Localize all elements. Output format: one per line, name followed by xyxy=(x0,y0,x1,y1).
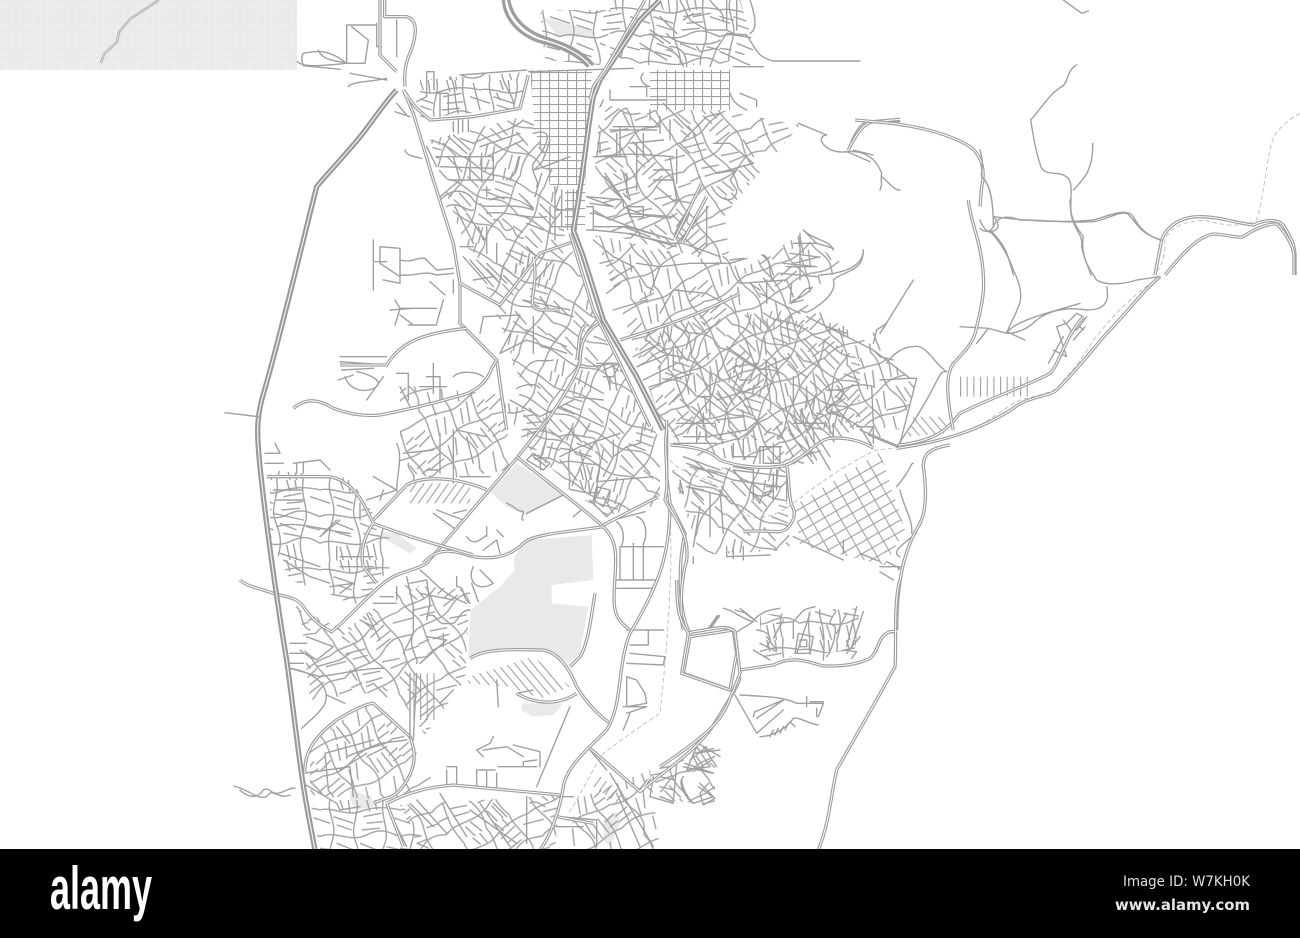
top river road xyxy=(506,0,591,66)
website url: www.alamy.com xyxy=(1115,896,1250,914)
left highway xyxy=(258,90,397,850)
north-east loop road xyxy=(848,119,900,150)
park areas xyxy=(350,463,620,847)
minor streets: south-east neighbourhoods xyxy=(660,607,863,805)
north park xyxy=(542,17,593,38)
far east road xyxy=(1155,217,1295,275)
major roads xyxy=(240,0,1295,850)
image id: Image ID: W7KH0K xyxy=(1123,874,1250,890)
minor streets: central and eastern district xyxy=(680,230,1087,580)
dense street textures xyxy=(270,0,915,850)
medium road network south xyxy=(240,420,740,847)
eastern main roads xyxy=(665,200,1160,630)
dashed rail line xyxy=(568,113,1300,813)
medium road network west xyxy=(293,0,740,430)
left side thin lines xyxy=(225,413,290,797)
minor streets: north-west district xyxy=(297,13,733,417)
minor streets: central junction xyxy=(560,330,880,500)
thin river lines east xyxy=(980,0,1162,333)
south-east box road xyxy=(660,580,900,850)
footer band xyxy=(0,849,1300,938)
inset top-left grey area with road xyxy=(0,0,297,70)
alamy logo: alamy xyxy=(50,855,152,922)
minor streets: south-west district xyxy=(240,430,720,847)
highway and main road south xyxy=(540,420,690,850)
central highway xyxy=(503,0,663,430)
minor streets: north-east district xyxy=(587,0,900,275)
